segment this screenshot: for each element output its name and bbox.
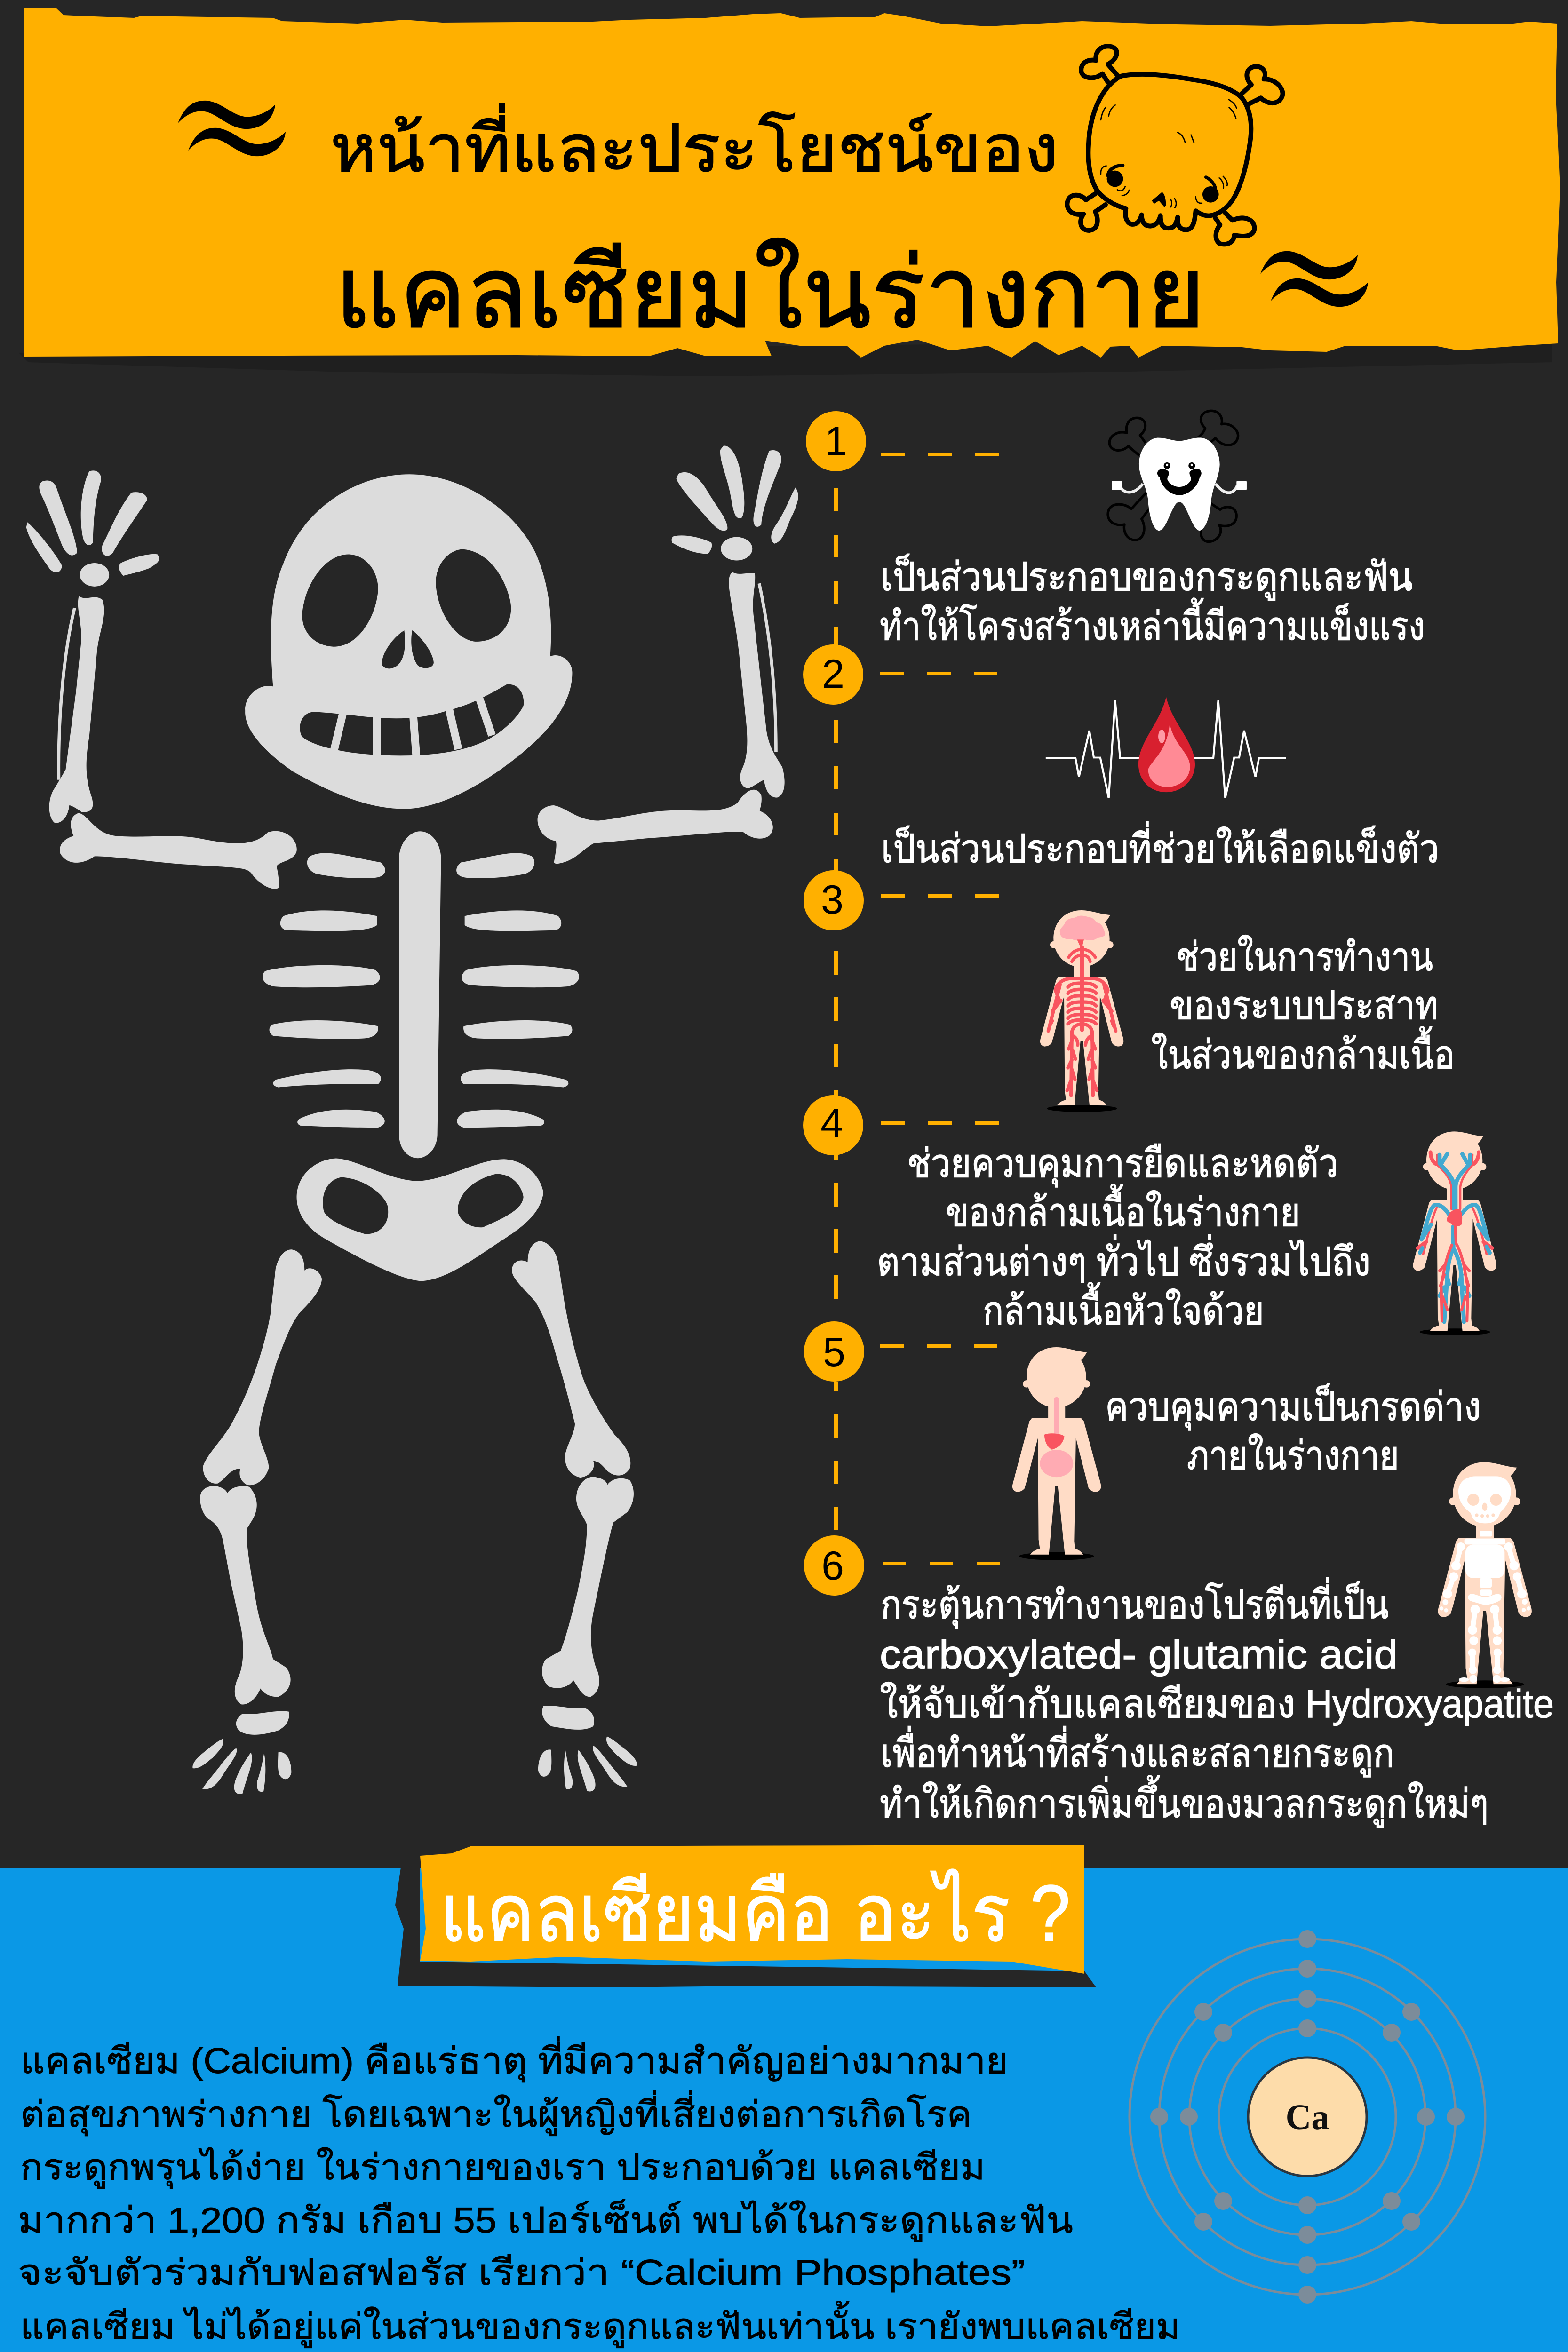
text: item 3: ของระบบประสาท (1170, 983, 1438, 1027)
heading ribbon: แคลเซียมคือ อะไร ? (440, 1869, 1070, 1958)
text: item 5: ควบคุมความเป็นกรดด่าง (1105, 1383, 1481, 1431)
text: item 6: เพื่อทำหน้าที่สร้างและสลายกระดูก (881, 1726, 1394, 1777)
right arm (538, 445, 798, 864)
text: item 3 (1151, 935, 1455, 1077)
left leg (192, 1249, 322, 1794)
text: item 3: ในส่วนของกล้ามเนื้อ (1151, 1026, 1455, 1077)
ribs (263, 853, 579, 1128)
skeleton lower body (192, 1158, 637, 1794)
title line 1: หน้าที่และประโยชน์ของ (330, 103, 1059, 185)
text: calcium description (17, 2036, 1550, 2352)
left arm (26, 470, 297, 889)
text: item 6: carboxylated- glutamic acid (880, 1632, 1398, 1677)
pelvis (297, 1158, 543, 1281)
text: item 3: ช่วยในการทำงาน (1176, 935, 1433, 979)
icon: blood drop with heartbeat (1046, 697, 1286, 798)
text: calcium description: ต่อสุขภาพร่างกาย โดยเฉพาะในผู้หญิงที่เสี่ยงต่อการเกิดโรค (20, 2090, 972, 2136)
icon: wave mark left (178, 101, 286, 156)
text: item 4: ของกล้ามเนื้อในร่างกาย (946, 1184, 1300, 1234)
sternum (399, 831, 441, 1158)
icon: circulatory system figure (1413, 1131, 1496, 1335)
text: item 5: ภายในร่างกาย (1187, 1433, 1399, 1478)
title line 2: แคลเซียมในร่างกาย (335, 238, 1205, 348)
icon: digestive system figure (1012, 1347, 1101, 1560)
skeleton upper body (26, 445, 798, 1158)
icon: calcium atom diagram: Ca (1286, 2098, 1329, 2137)
number badge 6: 6 (821, 1543, 844, 1589)
icon: outlined skull with crossbones (1067, 46, 1283, 244)
number badge 3: 3 (821, 877, 844, 922)
timeline dashes (834, 488, 838, 1530)
number badge 4: 4 (820, 1101, 843, 1146)
skull (245, 474, 572, 809)
number badge 6 (804, 1535, 864, 1596)
text: item 6: ทำให้เกิดการเพิ่มขึ้นของมวลกระดูกใหม่ๆ (880, 1775, 1488, 1828)
number badge 2: 2 (822, 652, 844, 697)
panel: title banner (19, 8, 1560, 376)
text: item 4: ช่วยควบคุมการยืดและหดตัว (907, 1141, 1338, 1188)
number badge 5 (804, 1321, 864, 1382)
text: item 1: ทำให้โครงสร้างเหล่านี้มีความแข็งแรง (880, 598, 1425, 648)
number badge 5: 5 (823, 1330, 845, 1375)
text: item 6: กระตุ้นการทำงานของโปรตีนที่เป็น (881, 1577, 1389, 1629)
number badge 1 (806, 411, 866, 471)
icon: tooth with crossbones (1108, 411, 1247, 542)
text: item 4: กล้ามเนื้อหัวใจด้วย (983, 1282, 1264, 1333)
text: item 5 (1105, 1383, 1481, 1478)
text: item 1 (880, 554, 1425, 648)
connector dashes (880, 454, 1000, 1564)
text: calcium description: มากกว่า 1,200 กรัม เกือบ 55 เปอร์เซ็นต์ พบได้ในกระดูกและฟัน (18, 2199, 1073, 2242)
text: calcium description: แคลเซียม (Calcium) คือแร่ธาตุ ที่มีความสำคัญอย่างมากมาย (20, 2036, 1008, 2082)
panel: numbered timeline (803, 411, 1554, 1828)
icon: calcium atom diagram (1130, 1930, 1485, 2304)
number badge 2 (803, 644, 863, 705)
text: item 2: เป็นส่วนประกอบที่ช่วยให้เลือดแข็งตัว (881, 821, 1439, 871)
text: item 6 (880, 1577, 1554, 1828)
text: calcium description: แคลเซียม ไม่ได้อยู่แค่ในส่วนของกระดูกและฟันเท่านั้น เรายังพบแคลเซียม (20, 2301, 1180, 2348)
icon: skeletal system figure (1438, 1462, 1532, 1688)
text: item 1: เป็นส่วนประกอบของกระดูกและฟัน (881, 554, 1413, 601)
panel: skeleton figure (26, 445, 798, 1794)
text: calcium description: กระดูกพรุนได้ง่าย ในร่างกายของเรา ประกอบด้วย แคลเซียม (20, 2147, 985, 2189)
number badge 3 (804, 870, 864, 930)
icon: nervous system figure (1040, 910, 1123, 1112)
text: calcium description: จะจับตัวร่วมกับฟอสฟอรัส เรียกว่า “Calcium Phosphates” (18, 2253, 1025, 2293)
text: item 4: ตามส่วนต่างๆ ทั่วไป ซึ่งรวมไปถึง (877, 1234, 1370, 1284)
panel: what is calcium (0, 1845, 1568, 2352)
heading ribbon (395, 1845, 1096, 1987)
number badge 4 (803, 1095, 863, 1155)
icon: wave mark right (1260, 251, 1368, 307)
text: item 4 (877, 1141, 1370, 1333)
number badge 1: 1 (825, 419, 847, 464)
right leg (512, 1241, 637, 1791)
